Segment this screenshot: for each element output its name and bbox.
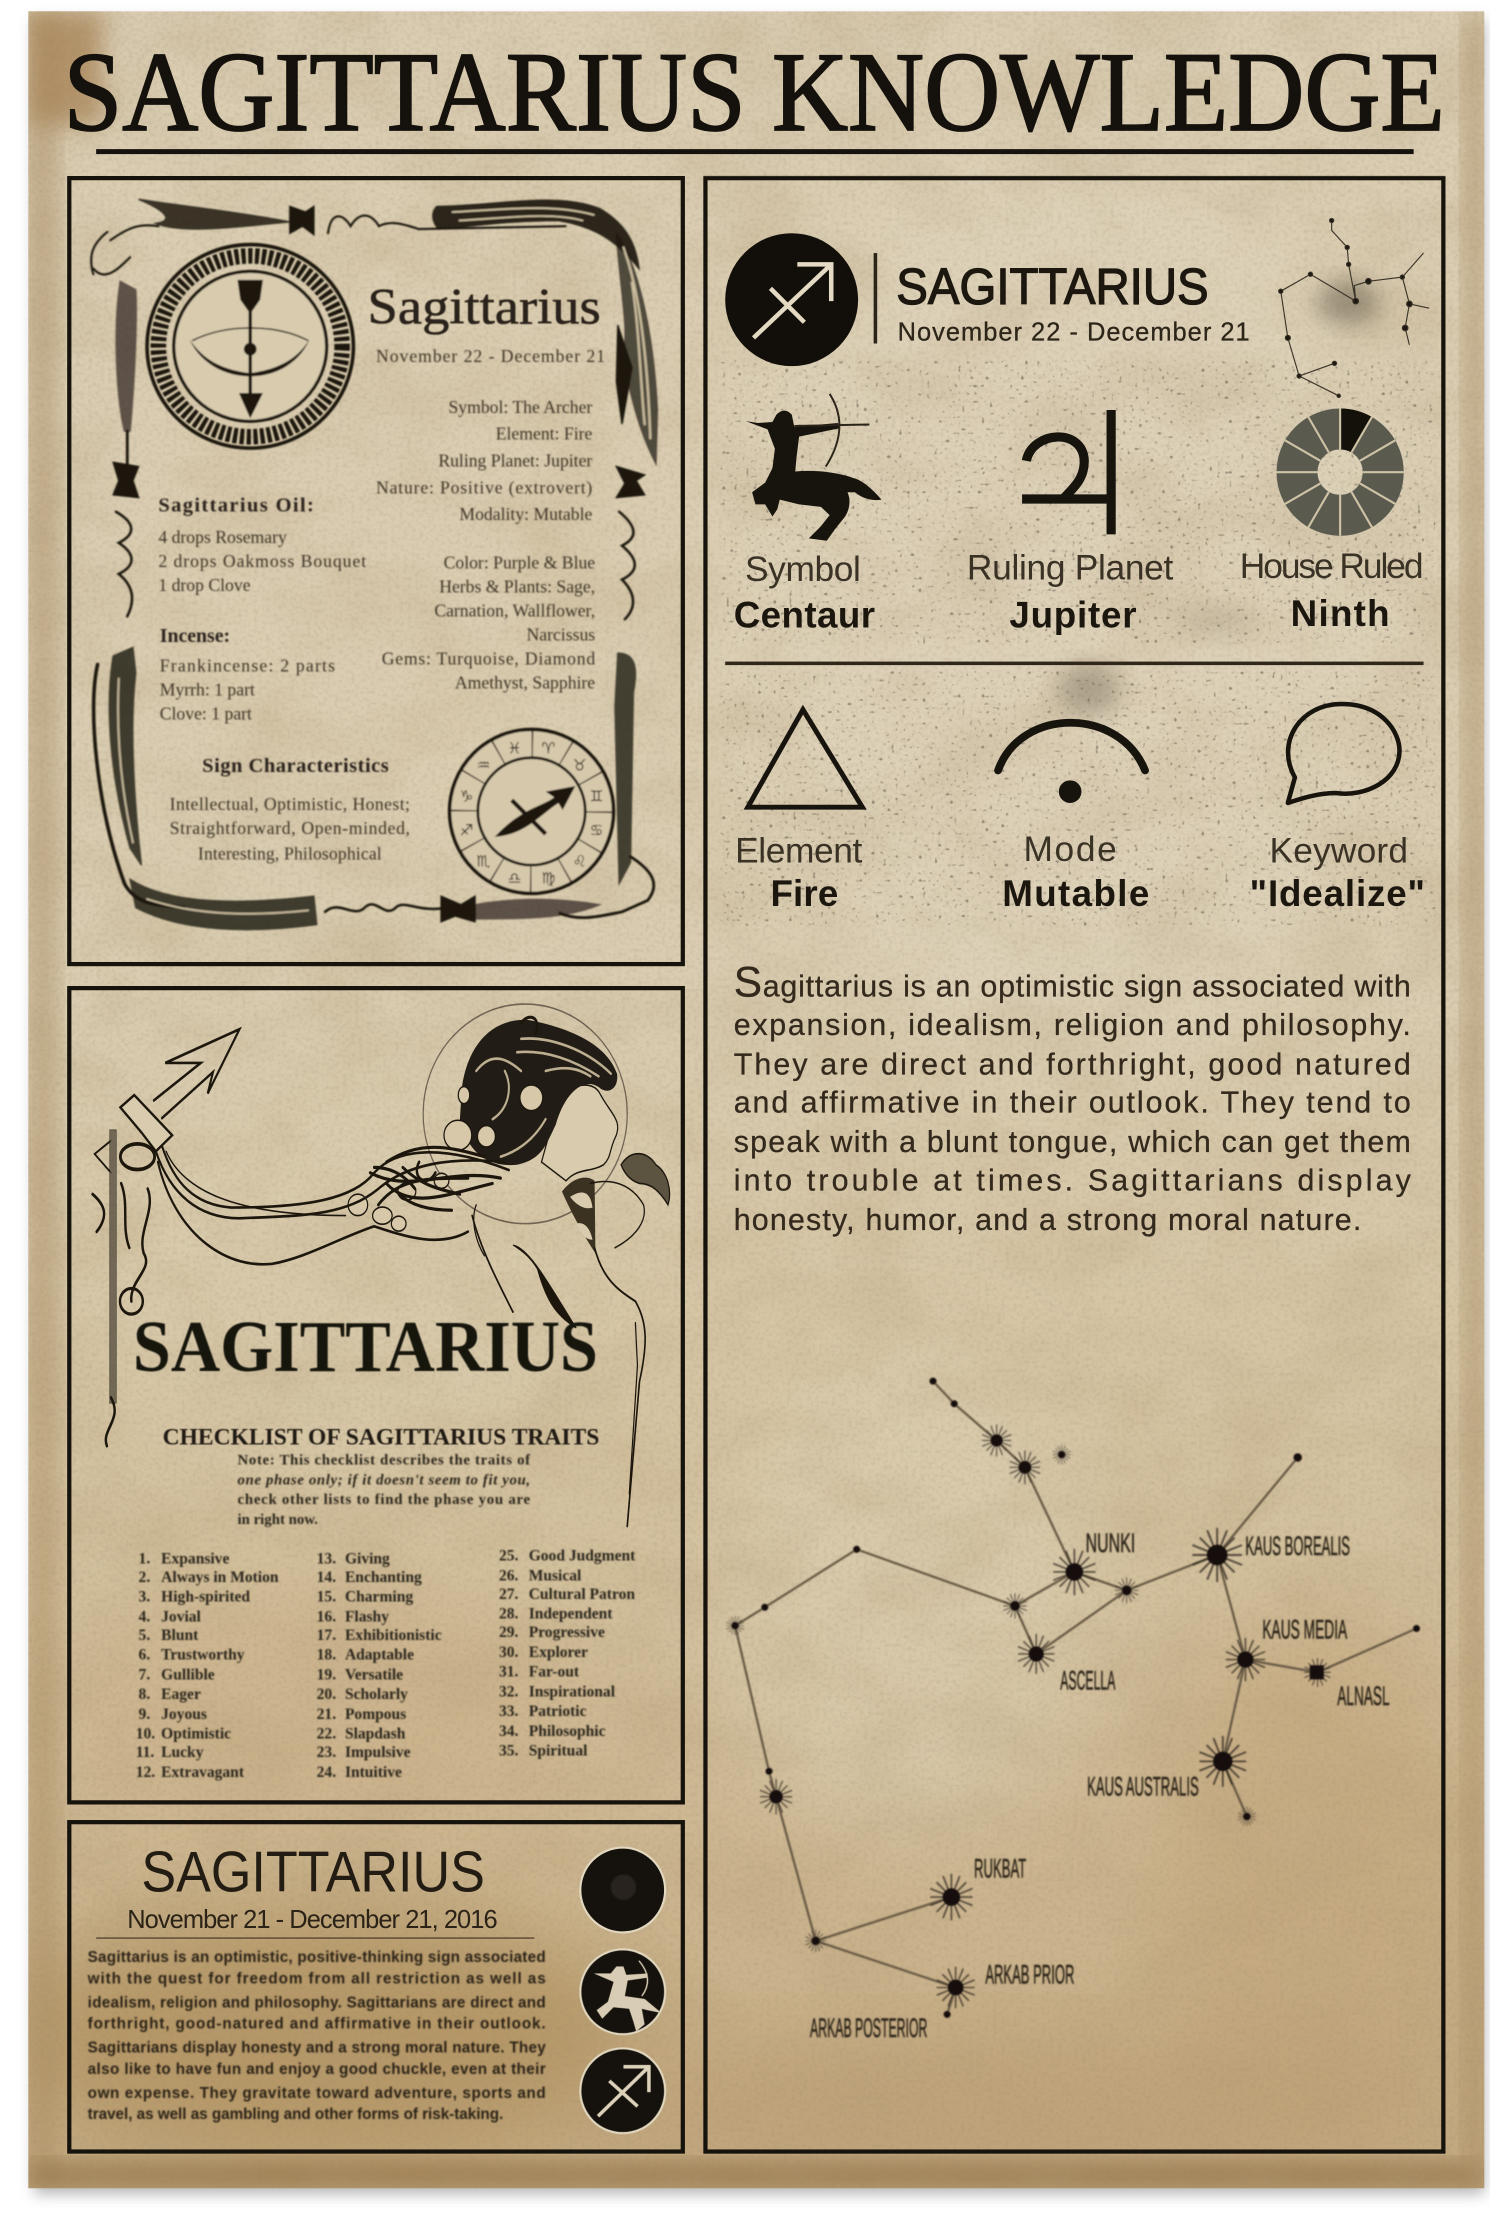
text: details: Ruling Planet: Jupiter — [438, 450, 592, 470]
face and neck — [542, 1085, 618, 1181]
list: traits column 2: Versatile — [345, 1666, 403, 1683]
text: description: speak with a blunt tongue, which can get them — [734, 1125, 1411, 1159]
divider — [96, 1937, 534, 1939]
label: ruling planet: Ruling Planet — [967, 549, 1174, 588]
zodiac wheel: ♑ — [460, 788, 473, 806]
list: traits column 1: 11. — [136, 1744, 154, 1761]
star labels: ALNASL — [1337, 1681, 1390, 1711]
star labels: ARKAB POSTERIOR — [810, 2013, 927, 2043]
list: traits column 1: Eager — [161, 1686, 201, 1703]
list: traits column 2: Exhibitionistic — [345, 1627, 442, 1644]
text: oil and incense recipes: Myrrh: 1 part — [160, 680, 255, 700]
label: house ruled: House Ruled — [1240, 547, 1424, 586]
label: keyword: "Idealize" — [1250, 873, 1425, 914]
list: traits column 2: Pompous — [345, 1706, 406, 1723]
list: traits column 3: 27. — [499, 1586, 519, 1603]
list: traits column 3: Inspirational — [529, 1683, 616, 1700]
zodiac wheel: ♉ — [573, 756, 587, 774]
list: traits column 1: Blunt — [161, 1627, 199, 1644]
label: ruling planet: Jupiter — [1009, 595, 1137, 636]
ornamental scroll frame — [91, 199, 657, 930]
list: traits column 1: 4. — [139, 1608, 150, 1625]
text: oil and incense recipes: 1 drop Clove — [158, 575, 251, 595]
divider — [725, 662, 1424, 665]
star labels: ASCELLA — [1060, 1665, 1115, 1695]
star labels — [810, 1528, 1390, 2043]
star labels: ARKAB PRIOR — [985, 1959, 1074, 1989]
text: oil and incense recipes: Sagittarius Oil: — [158, 495, 314, 517]
list: traits column 3: 25. — [499, 1548, 519, 1565]
list: traits column 2: 21. — [317, 1706, 336, 1723]
heading: SAGITTARIUS: SAGITTARIUS — [141, 1840, 485, 1904]
list: traits column 2: 22. — [317, 1726, 336, 1743]
text: sign characteristics: Straightforward, Open-minded, — [170, 818, 410, 838]
text: note: one phase only; if it doesn't seem to fit you, — [238, 1472, 530, 1488]
icon: sagittarius symbol circle — [580, 2048, 665, 2133]
list: traits column 2: 20. — [317, 1686, 336, 1703]
text: note — [238, 1453, 531, 1528]
icon: dark circle — [580, 1848, 665, 1932]
text: description: Sagittarians display honesty and a strong moral nature. They — [88, 2040, 546, 2057]
list: traits column 1: 10. — [136, 1726, 155, 1743]
list: traits column 1: Expansive — [161, 1550, 229, 1567]
text: oil and incense recipes: Clove: 1 part — [160, 704, 252, 724]
list: traits column 2: Charming — [345, 1589, 413, 1606]
text: details: November 22 - December 21 — [376, 346, 605, 366]
list: traits column 2: 18. — [317, 1647, 336, 1664]
list: traits column 1: Optimistic — [161, 1726, 231, 1743]
list: traits column 2: Enchanting — [345, 1569, 422, 1586]
text: sign characteristics: Sign Characteristics — [202, 755, 389, 777]
icon: triangle — [748, 710, 862, 807]
list: traits column 3: 28. — [499, 1606, 519, 1623]
zodiac wheel: ♈ — [542, 739, 555, 757]
list: traits column 1: 1. — [139, 1550, 150, 1567]
text: description — [734, 959, 1412, 1237]
stars — [727, 1378, 1420, 2018]
icon: house wheel — [1277, 409, 1404, 536]
text: description: own expense. They gravitate toward adventure, sports and — [88, 2085, 546, 2102]
list: traits column 3: Explorer — [529, 1644, 588, 1661]
list: traits column 3: Good Judgment — [529, 1548, 636, 1565]
label: house ruled — [1240, 547, 1424, 634]
constellation map — [727, 1378, 1420, 2043]
list: traits column 1: Jovial — [161, 1608, 202, 1625]
list: traits column 3: Patriotic — [529, 1703, 587, 1720]
list: traits column 2: 19. — [317, 1666, 336, 1683]
list: traits column 1: Always in Motion — [161, 1569, 279, 1586]
text: description: forthright, good-natured and affirmative in their outlook. — [88, 2016, 546, 2033]
list: traits column 1: Gullible — [161, 1666, 215, 1683]
panel: scroll with sign details — [69, 178, 683, 964]
star labels: KAUS AUSTRALIS — [1087, 1771, 1199, 1801]
text: description: Sagittarius is an optimistic, positive-thinking sign associated — [88, 1949, 546, 1966]
list: traits column 2: 17. — [317, 1627, 336, 1644]
zodiac wheel: ♌ — [573, 853, 587, 871]
zodiac wheel: ♏ — [477, 853, 491, 871]
text: oil and incense recipes: 2 drops Oakmoss Bouquet — [158, 551, 366, 571]
subheading: date: November 22 - December 21 — [898, 319, 1250, 347]
list: traits column 2: 14. — [317, 1569, 336, 1586]
text: details: Modality: Mutable — [459, 504, 592, 524]
list: traits column 2: Adaptable — [345, 1647, 414, 1664]
subheading: date: November 21 - December 21, 2016 — [127, 1906, 498, 1934]
text: description: travel, as well as gambling and other forms of risk-taking. — [88, 2106, 503, 2123]
text: oil and incense recipes: 4 drops Rosemary — [158, 527, 287, 547]
label: keyword — [1250, 831, 1425, 914]
list: traits column 1: 12. — [136, 1764, 155, 1781]
list: traits column 3: 29. — [499, 1624, 519, 1641]
text: details: Carnation, Wallflower, — [434, 600, 595, 620]
text: description: also like to have fun and enjoy a good chuckle, even at their — [88, 2061, 546, 2078]
heading: checklist: CHECKLIST OF SAGITTARIUS TRAITS — [163, 1425, 599, 1451]
list: traits column 3: Far-out — [529, 1664, 580, 1681]
list: traits column 1: 7. — [139, 1666, 150, 1683]
panel: checklist of traits — [69, 988, 683, 1802]
text: details: Herbs & Plants: Sage, — [439, 576, 595, 596]
list: traits column 1: Extravagant — [161, 1764, 245, 1781]
zodiac wheel: ♋ — [590, 821, 604, 839]
list: traits column 2: 16. — [317, 1608, 336, 1625]
label: element: Element — [735, 831, 863, 870]
list: traits column 1 — [136, 1550, 279, 1781]
label: element — [735, 831, 863, 914]
label: symbol — [734, 550, 875, 636]
list: traits column 3: Cultural Patron — [529, 1586, 635, 1603]
list: traits column 3: Independent — [529, 1606, 613, 1623]
list: traits column 3: 26. — [499, 1567, 519, 1584]
star labels: KAUS MEDIA — [1262, 1614, 1347, 1644]
icon: centaur circle — [580, 1949, 665, 2034]
hair — [460, 1020, 617, 1165]
text: note: check other lists to find the phase you are — [238, 1492, 531, 1508]
label: symbol: Symbol — [745, 550, 861, 589]
text: details: Nature: Positive (extrovert) — [376, 477, 592, 497]
text: note: in right now. — [238, 1512, 318, 1528]
icon: sagittarius badge — [725, 233, 858, 366]
zodiac wheel: ♊ — [590, 788, 604, 806]
list: traits column 3: 33. — [499, 1703, 519, 1720]
list: traits column 1: 5. — [139, 1627, 150, 1644]
constellation lines — [735, 1381, 1416, 2014]
label: house ruled: Ninth — [1291, 593, 1390, 634]
zodiac wheel: ♒ — [477, 756, 490, 774]
text: description: expansion, idealism, religion and philosophy. — [734, 1008, 1411, 1042]
illustration: woman with arrow — [93, 1004, 670, 1526]
ink speckle texture — [721, 360, 1435, 926]
list: traits column 3: Musical — [529, 1567, 582, 1584]
panel: sign overview and constellation — [705, 178, 1443, 2152]
text: description — [87, 1949, 546, 2123]
list: traits column 1: Joyous — [161, 1706, 207, 1723]
label: ruling planet — [967, 549, 1174, 636]
zodiac wheel: ♓ — [508, 739, 522, 757]
text: details: Element: Fire — [496, 424, 592, 444]
icon: mini constellation — [1279, 218, 1429, 398]
list: traits column 2: Giving — [345, 1550, 390, 1567]
label: mode: Mode — [1023, 830, 1117, 869]
list: traits column 2: Impulsive — [345, 1744, 411, 1761]
text: details: Narcissus — [526, 624, 595, 644]
medallion: bow and arrow — [147, 245, 353, 448]
list: traits column 1: High-spirited — [161, 1589, 250, 1606]
list: traits column 1: 9. — [139, 1706, 150, 1723]
icon: jupiter — [1022, 410, 1111, 534]
zodiac wheel: ♐ — [460, 821, 473, 839]
title underline — [96, 149, 1414, 154]
star labels: RUKBAT — [974, 1853, 1026, 1883]
list: traits column 3 — [499, 1548, 636, 1760]
text: note: Note: This checklist describes the traits of — [238, 1453, 531, 1469]
text: oil and incense recipes: Frankincense: 2 parts — [160, 655, 335, 675]
list: traits column 3: 32. — [499, 1683, 519, 1700]
text: description: with the quest for freedom from all restriction as well as — [87, 1970, 546, 1987]
label: keyword: Keyword — [1269, 831, 1408, 870]
list: traits column 2: 13. — [317, 1550, 336, 1567]
icon: speech bubble — [1288, 704, 1400, 803]
list: traits column 3: 34. — [499, 1723, 519, 1740]
divider — [874, 253, 877, 344]
text: oil and incense recipes: Incense: — [160, 625, 230, 647]
text: details: Color: Purple & Blue — [444, 552, 595, 572]
text: details: Gems: Turquoise, Diamond — [382, 648, 595, 668]
text: description: honesty, humor, and a strong moral nature. — [734, 1203, 1361, 1237]
list: traits column 3: 31. — [499, 1664, 519, 1681]
star labels: KAUS BOREALIS — [1245, 1531, 1350, 1561]
label: element: Fire — [770, 873, 838, 914]
text: details: Symbol: The Archer — [448, 397, 592, 417]
text: description: into trouble at times. Sagittarians display — [734, 1163, 1412, 1197]
list: traits column 1: Trustworthy — [161, 1647, 245, 1664]
text: description: They are direct and forthright, good natured — [734, 1047, 1411, 1081]
list: traits column 1: 2. — [139, 1569, 150, 1586]
text: description: Sagittarius is an optimistic sign associated with — [734, 959, 1411, 1006]
list: traits column 2: Scholarly — [345, 1686, 408, 1703]
heading: Sagittarius: Sagittarius — [368, 280, 601, 336]
list: traits column 2 — [317, 1550, 442, 1781]
text: description: and affirmative in their outlook. They tend to — [734, 1086, 1411, 1120]
list: traits column 3: 30. — [499, 1644, 519, 1661]
list: traits column 2: 24. — [317, 1764, 336, 1781]
list: traits column 2: 15. — [317, 1589, 336, 1606]
star labels: NUNKI — [1086, 1528, 1135, 1558]
text: sign characteristics: Intellectual, Optimistic, Honest; — [170, 794, 410, 814]
list: traits column 2: Flashy — [345, 1608, 389, 1625]
label: mode — [1002, 830, 1149, 914]
list: traits column 2: 23. — [317, 1744, 336, 1761]
label: mode: Mutable — [1002, 873, 1149, 914]
panel: sagittarius summary — [69, 1822, 683, 2152]
icon: centaur — [746, 394, 881, 541]
zodiac wheel: ♎ — [508, 870, 522, 888]
label: symbol: Centaur — [734, 595, 875, 636]
text: details — [376, 346, 605, 692]
text: description: idealism, religion and philosophy. Sagittarians are direct and — [88, 1994, 546, 2011]
heading: SAGITTARIUS: SAGITTARIUS — [896, 258, 1209, 315]
heading: SAGITTARIUS: SAGITTARIUS — [133, 1306, 598, 1387]
list: traits column 1: 3. — [139, 1589, 150, 1606]
list: traits column 2: Slapdash — [345, 1726, 406, 1743]
list: traits column 1: Lucky — [161, 1744, 204, 1761]
list: traits column 3: Spiritual — [529, 1743, 588, 1760]
list: traits column 3: Philosophic — [529, 1723, 606, 1740]
list: traits column 1: 8. — [139, 1686, 150, 1703]
list: traits column 3: Progressive — [529, 1624, 605, 1641]
list: traits column 1: 6. — [139, 1647, 150, 1664]
zodiac wheel — [450, 729, 614, 893]
text: sign characteristics — [170, 755, 410, 863]
zodiac wheel: ♍ — [542, 870, 556, 888]
list: traits column 2: Intuitive — [345, 1764, 402, 1781]
text: oil and incense recipes — [158, 495, 366, 724]
icon: mutable arc and dot — [998, 723, 1145, 803]
text: details: Amethyst, Sapphire — [455, 672, 595, 692]
text: sign characteristics: Interesting, Philosophical — [198, 843, 382, 863]
list: traits column 3: 35. — [499, 1743, 519, 1760]
